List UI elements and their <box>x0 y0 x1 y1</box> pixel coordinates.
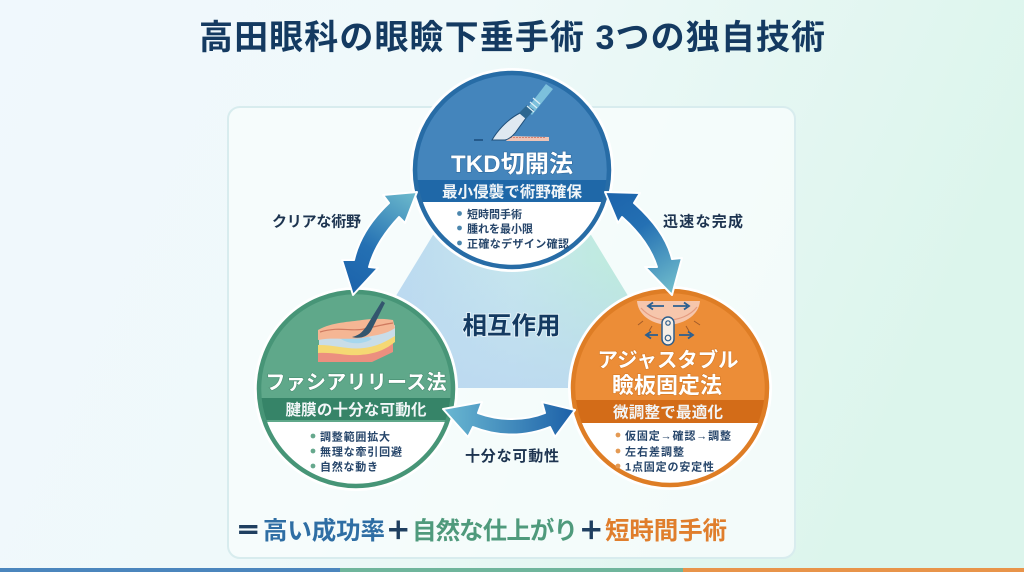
circle: adjustable tarsal fixation <box>568 286 772 490</box>
heading: TKD: TKD切開法 <box>451 151 573 178</box>
label: clear field: クリアな術野 <box>272 214 361 230</box>
bullet list: adjustable tarsal fixation: 仮固定→確認→調整 <box>625 428 731 442</box>
main panel <box>228 107 795 558</box>
bullet list: TKD: 腫れを最小限 <box>467 222 533 236</box>
result formula: 高い成功率 <box>263 517 385 545</box>
bottom color bar <box>0 568 1024 572</box>
center label: interaction: 相互作用 <box>462 312 560 340</box>
bullet list: TKD <box>457 207 569 250</box>
result formula: 自然な仕上がり <box>412 516 578 545</box>
title: 高田眼科の眼瞼下垂手術 3つの独自技術 <box>199 19 825 57</box>
bullet list: adjustable tarsal fixation <box>616 428 731 474</box>
subheading: TKD: 最小侵襲で術野確保 <box>442 182 582 201</box>
subheading: fascia release: 腱膜の十分な可動化 <box>286 401 427 419</box>
heading: fascia release: ファシアリリース法 <box>266 371 446 394</box>
result formula: ＋ <box>579 518 604 545</box>
heading: adjustable tarsal fixation: 瞼板固定法 <box>612 373 722 398</box>
arrow: fascia release to adjustable fixation <box>443 402 575 437</box>
icon: scalpel <box>474 84 553 141</box>
subheading: adjustable tarsal fixation: 微調整で最適化 <box>613 402 723 422</box>
result formula: ＋ <box>386 518 410 545</box>
label: sufficient mobility: 十分な可動性 <box>465 448 559 465</box>
result formula: 短時間手術 <box>605 517 727 545</box>
label: rapid completion: 迅速な完成 <box>663 212 743 230</box>
bullet list: fascia release <box>311 430 402 474</box>
bullet list: adjustable tarsal fixation: 左右差調整 <box>625 444 684 458</box>
circle: TKD incision <box>410 68 614 272</box>
circle: fascia release <box>254 288 458 491</box>
heading: adjustable tarsal fixation: アジャスタブル <box>598 348 738 372</box>
icon: adjustable plate on eyelid <box>637 301 700 345</box>
bullet list: TKD: 短時間手術 <box>467 207 522 221</box>
bullet list: fascia release: 調整範囲拡大 <box>320 430 390 444</box>
icon: tissue layers with forceps <box>318 301 395 362</box>
bullet list: TKD: 正確なデザイン確認 <box>467 236 569 250</box>
bullet list: adjustable tarsal fixation: 1点固定の安定性 <box>625 460 714 474</box>
result formula <box>236 516 727 545</box>
arrow: TKD to adjustable fixation <box>605 192 682 295</box>
center triangle <box>340 105 684 388</box>
result formula: ＝ <box>236 518 260 545</box>
bullet list: fascia release: 無理な牽引回避 <box>320 444 402 458</box>
heading: adjustable tarsal fixation <box>598 348 738 398</box>
bullet list: fascia release: 自然な動き <box>320 460 378 474</box>
arrow: TKD to fascia release <box>342 192 417 295</box>
